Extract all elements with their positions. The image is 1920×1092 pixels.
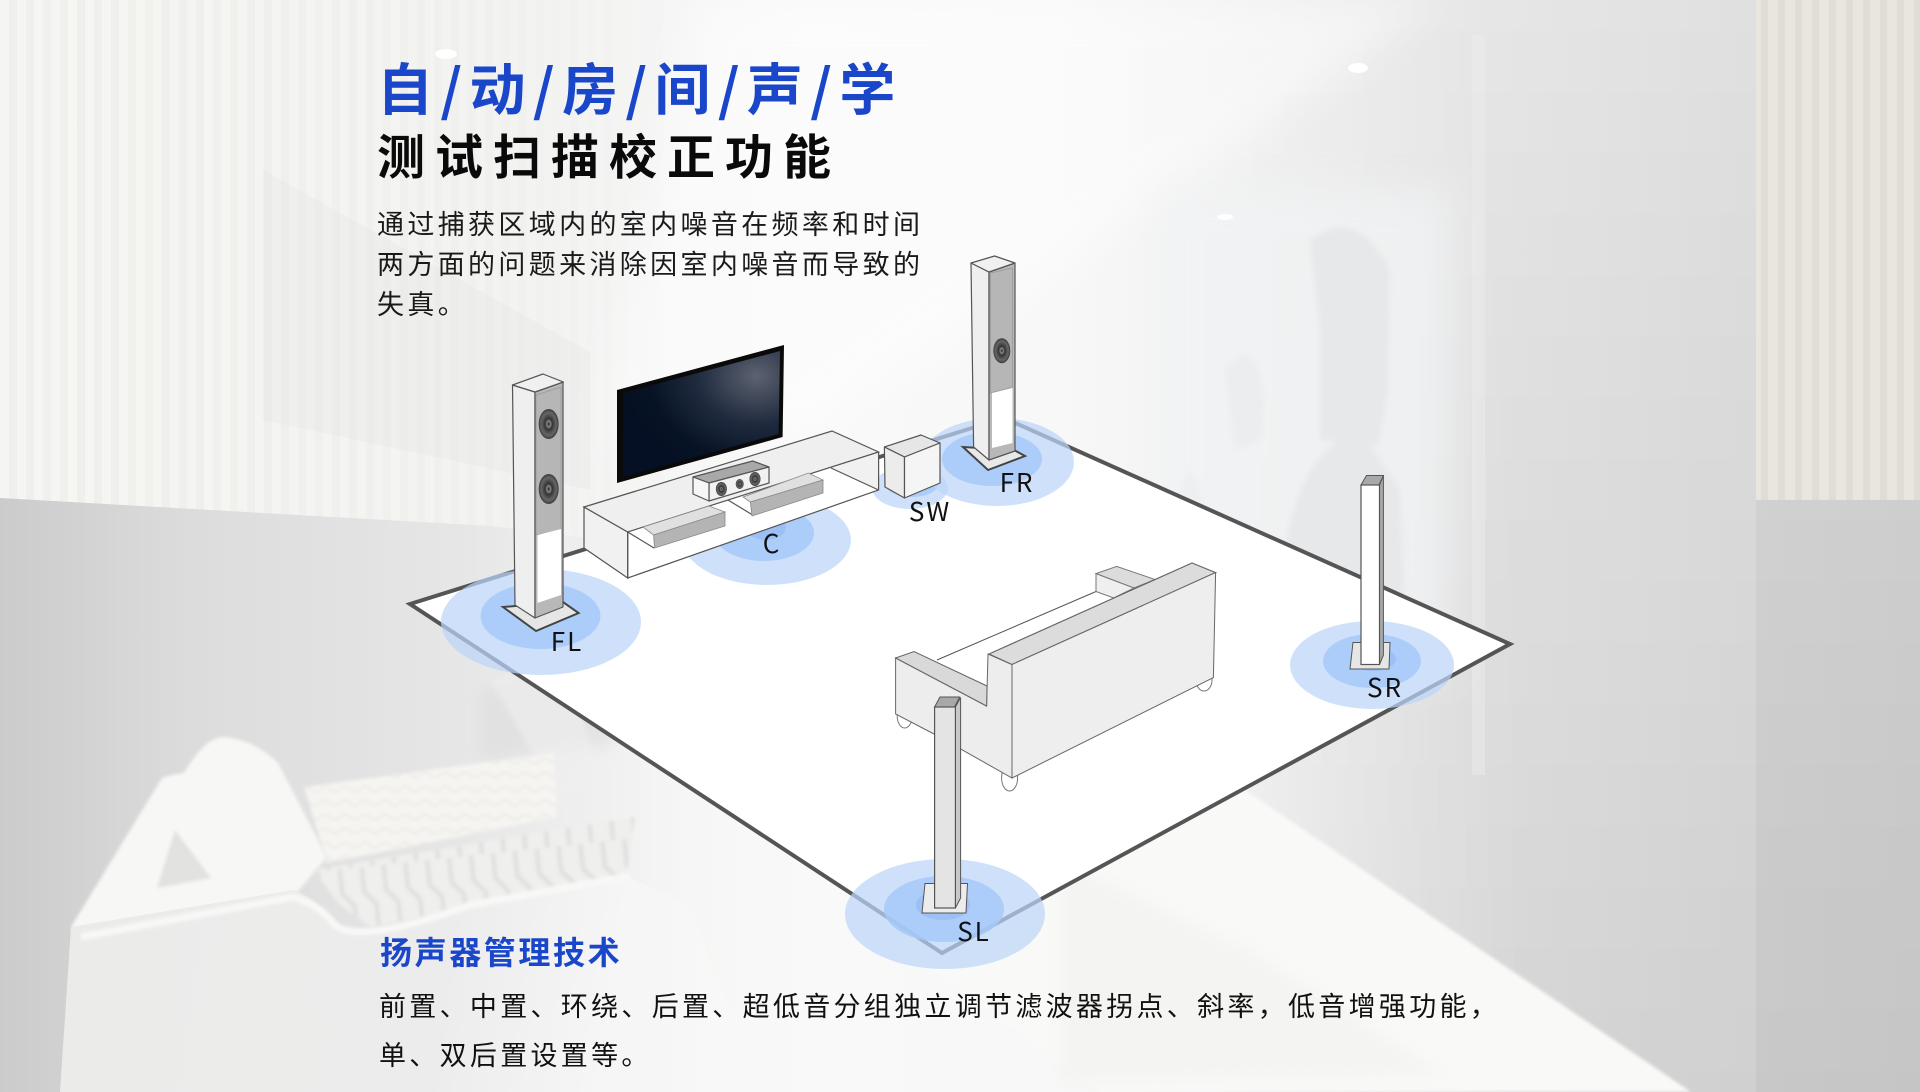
label: C: C [763,524,781,561]
surround right speaker [1350,476,1390,669]
tv stand [584,431,879,578]
label: SL: SL [957,912,991,949]
sofa [896,563,1216,791]
sound zone: SR [1290,621,1454,709]
description text: 通过捕获区域内的室内噪音在频率和时间 [377,203,923,242]
body text: speaker management: 前置、中置、环绕、后置、超低音分组独立调节滤波器拐点、斜率，低音增强功能， [379,985,1500,1024]
sound zone: FL [441,569,641,675]
sound zone: SW [872,467,948,509]
body text: speaker management: 单、双后置设置等。 [379,1034,652,1073]
sound zone: FR [920,418,1074,506]
surround left speaker [922,697,968,913]
label: FL: FL [551,622,583,659]
subtitle: 测试扫描校正功能 [377,118,841,188]
floor plan: white room area [410,418,1510,953]
label: SR: SR [1367,668,1403,705]
description text: 两方面的问题来消除因室内噪音而导致的 [377,243,923,282]
subwoofer [884,435,940,498]
heading: speaker management: 扬声器管理技术 [380,928,622,974]
label: SW: SW [909,492,951,529]
front right speaker [963,256,1025,470]
television [617,345,784,483]
label: FR: FR [1000,463,1034,500]
center speaker [693,461,769,501]
sound zone: C [683,495,851,585]
title: 自/动/房/间/声/学 [377,46,903,127]
sound zone: SL [845,859,1045,969]
description text: 失真。 [377,283,468,322]
front left speaker [503,374,579,631]
body text: speaker management [379,985,1500,1073]
description text [377,203,923,322]
